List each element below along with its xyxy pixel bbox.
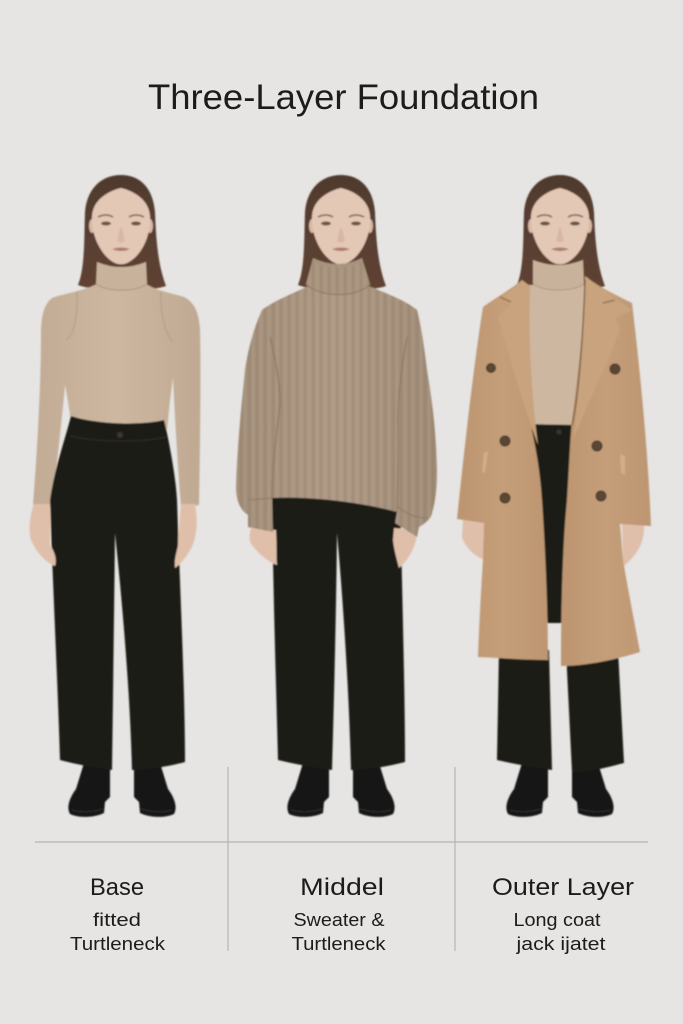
label: base: fitted bbox=[93, 909, 141, 930]
trousers bbox=[272, 490, 405, 770]
ribbed sweater bbox=[236, 258, 437, 537]
label: base bbox=[70, 874, 166, 954]
label: middel: Middel bbox=[300, 874, 384, 901]
buttons bbox=[486, 364, 620, 503]
figure: outer layer, long camel coat bbox=[457, 175, 651, 817]
grid lines bbox=[35, 767, 648, 951]
hands bbox=[462, 518, 644, 567]
hands bbox=[30, 504, 197, 568]
label: outer layer bbox=[492, 874, 634, 954]
label: base: Turtleneck bbox=[70, 933, 166, 954]
figure: base layer, fitted turtleneck and trousers bbox=[30, 175, 200, 817]
boots bbox=[506, 763, 614, 817]
hands bbox=[250, 528, 417, 568]
pocket flaps bbox=[482, 451, 625, 475]
boots bbox=[68, 763, 176, 817]
head and hair bbox=[517, 175, 605, 290]
camel coat bbox=[457, 276, 651, 666]
label: middel: Turtleneck bbox=[292, 933, 386, 954]
boots bbox=[287, 763, 395, 817]
figure: middle layer, chunky sweater and trousers bbox=[236, 175, 437, 817]
trousers bbox=[50, 416, 185, 770]
title: Three-Layer Foundation bbox=[148, 78, 539, 117]
lower trousers bbox=[497, 650, 624, 772]
label: outer layer: Long coat bbox=[514, 909, 600, 930]
label: outer layer: Outer Layer bbox=[492, 874, 634, 901]
head and hair bbox=[78, 175, 166, 290]
label: outer layer: jack ijatet bbox=[515, 933, 606, 954]
label: base: Base bbox=[90, 874, 144, 901]
inner turtleneck and dark trouser front bbox=[522, 260, 590, 623]
head and hair bbox=[298, 175, 386, 290]
fitted turtleneck bbox=[33, 262, 200, 508]
label: middel bbox=[292, 874, 386, 954]
label: middel: Sweater & bbox=[294, 909, 385, 930]
